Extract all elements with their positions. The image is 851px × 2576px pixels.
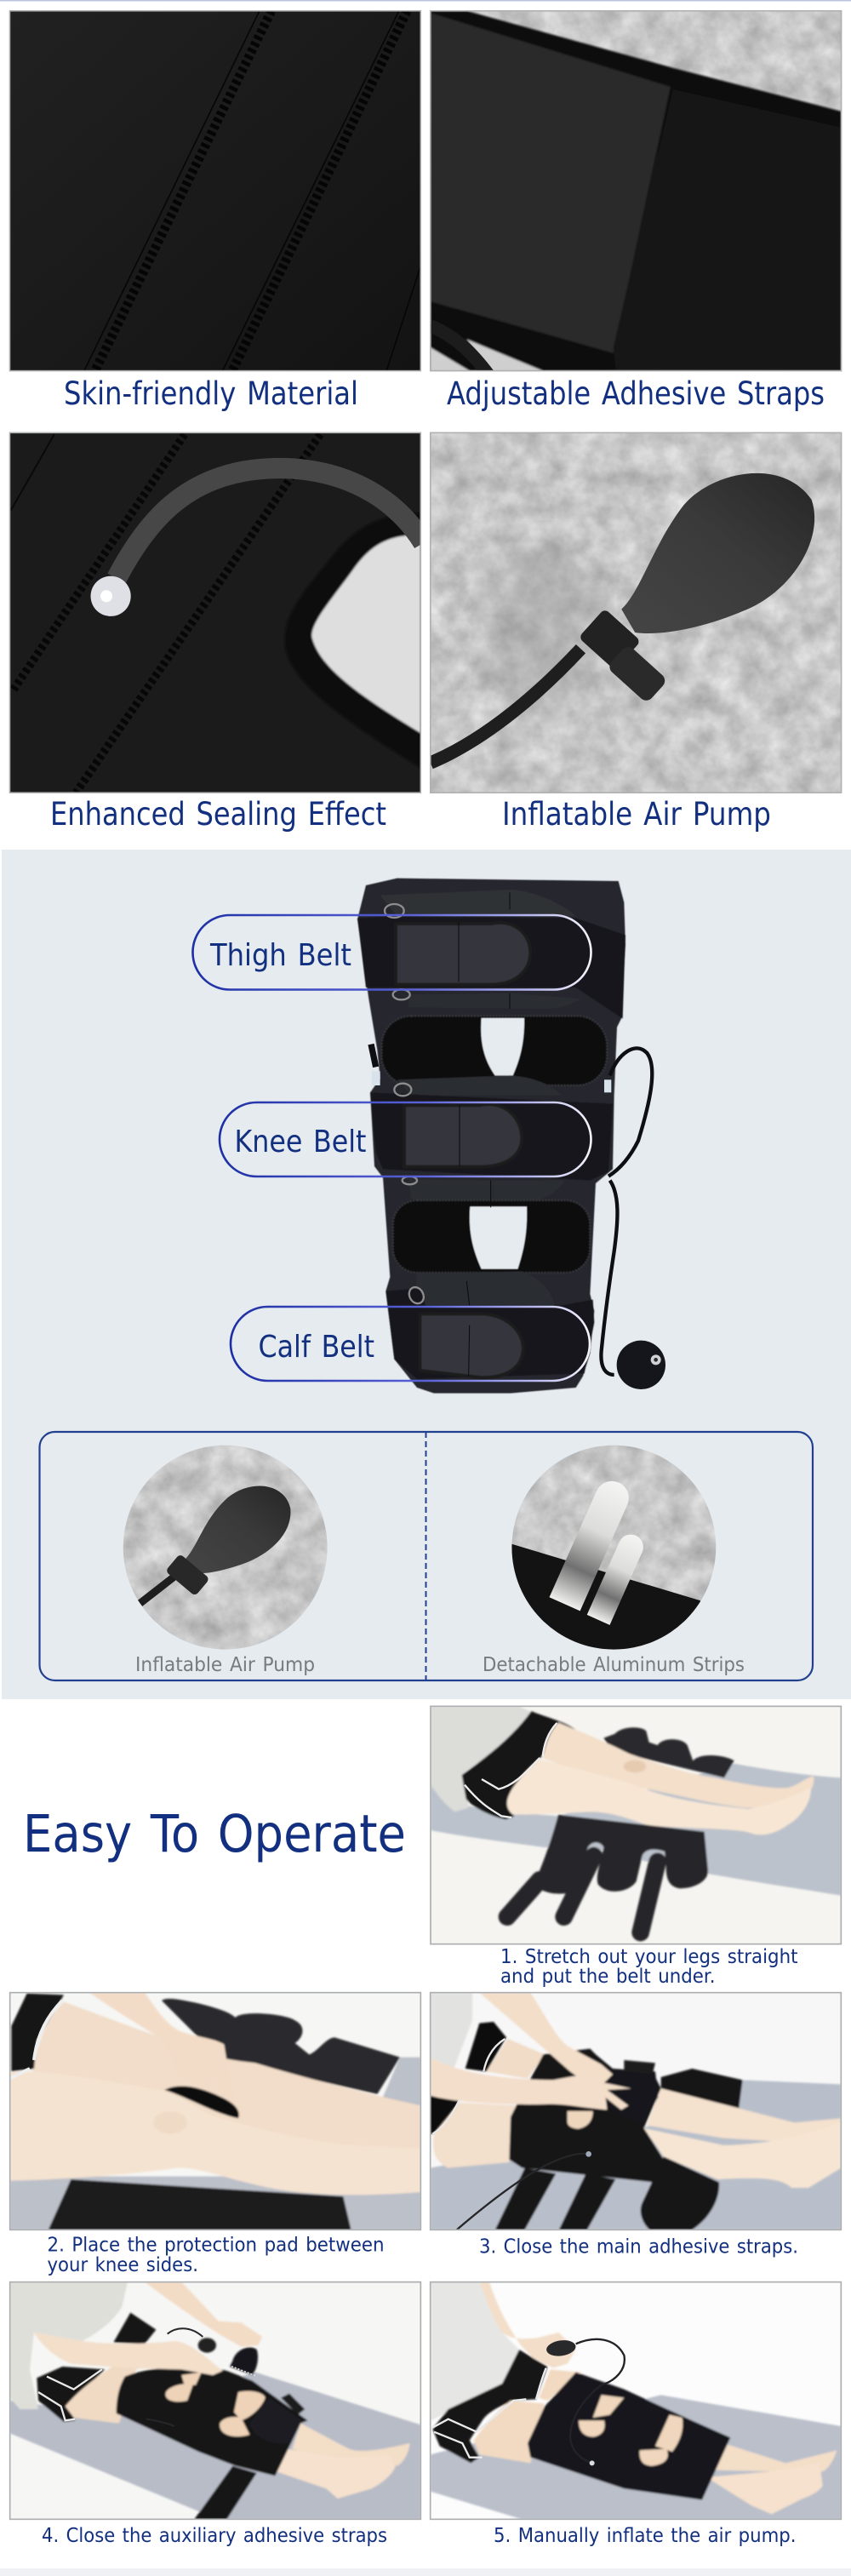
icon: air pump circle bbox=[119, 1443, 331, 1655]
caption: step 3: 3. Close the main adhesive straps. bbox=[479, 2235, 798, 2258]
panel: enhanced sealing effect bbox=[9, 432, 423, 793]
label: detachable aluminum strips: Detachable Aluminum Strips bbox=[483, 1654, 745, 1676]
caption: inflatable air pump: Inflatable Air Pump bbox=[502, 796, 771, 833]
caption: enhanced sealing effect: Enhanced Sealing Effect bbox=[50, 796, 386, 833]
caption: step 4: 4. Close the auxiliary adhesive straps bbox=[42, 2525, 387, 2547]
callout: thigh belt bbox=[192, 915, 591, 989]
callout: calf belt bbox=[231, 1307, 590, 1381]
product: leg belt bbox=[357, 879, 665, 1394]
photo: step 5 bbox=[431, 2282, 841, 2519]
caption: step 2 bbox=[48, 2234, 385, 2276]
callout: thigh belt: Thigh Belt bbox=[209, 938, 351, 973]
box: accessories bbox=[39, 1432, 813, 1680]
shirt bbox=[431, 1706, 535, 1812]
callout: knee belt bbox=[220, 1102, 591, 1176]
panel: adjustable adhesive straps bbox=[431, 11, 842, 375]
calf strap bbox=[414, 1271, 555, 1305]
photo: step 3 bbox=[431, 1993, 841, 2230]
panel: product overview bbox=[2, 850, 851, 1699]
belt bbox=[603, 1727, 734, 1777]
caption: step 2: 2. Place the protection pad between bbox=[48, 2234, 385, 2256]
photo: step 2 bbox=[10, 1993, 420, 2230]
caption: skin-friendly material: Skin-friendly Material bbox=[64, 375, 358, 412]
shorts bbox=[462, 1711, 575, 1819]
legs bbox=[543, 1722, 814, 1808]
panel: skin-friendly material bbox=[9, 11, 420, 371]
icon: aluminum strips circle bbox=[511, 1443, 722, 1655]
air tube bbox=[371, 1045, 652, 1375]
caption: step 5: 5. Manually inflate the air pump. bbox=[494, 2525, 797, 2547]
heading: easy to operate: Easy To Operate bbox=[23, 1804, 406, 1864]
opening lower bbox=[393, 1200, 590, 1273]
opening upper bbox=[381, 1016, 607, 1085]
knee strap bbox=[397, 1075, 562, 1096]
callout: calf belt: Calf Belt bbox=[259, 1330, 374, 1365]
label: inflatable air pump: Inflatable Air Pump bbox=[135, 1654, 315, 1676]
top thigh strap bbox=[380, 890, 576, 917]
photo: step 4 bbox=[10, 2282, 420, 2519]
caption: step 1 bbox=[500, 1946, 798, 1988]
caption: step 2: your knee sides. bbox=[48, 2254, 198, 2276]
air bulb bbox=[617, 1341, 665, 1389]
callout: knee belt: Knee Belt bbox=[235, 1125, 366, 1159]
photo: step 1 bbox=[431, 1706, 841, 1944]
panel: inflatable air pump bbox=[431, 432, 842, 793]
caption: step 1: and put the belt under. bbox=[500, 1966, 715, 1988]
caption: step 1: 1. Stretch out your legs straight bbox=[500, 1946, 798, 1968]
